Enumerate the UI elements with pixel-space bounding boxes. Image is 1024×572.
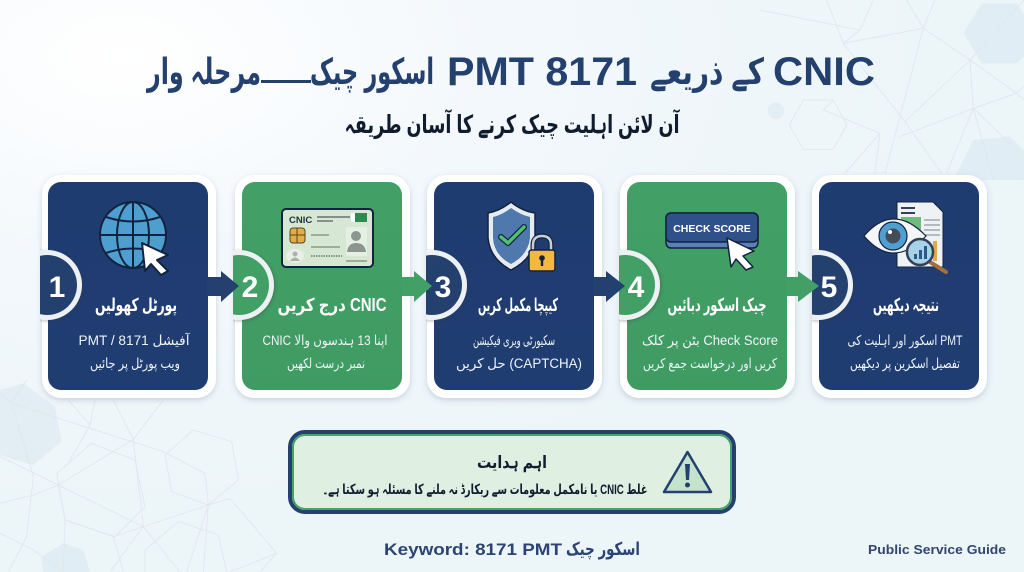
step 5 heading: نتیجہ دیکھیں (873, 295, 939, 316)
step 5 text (848, 333, 962, 372)
step 4 text: Check Score بٹن پر کلک (642, 333, 778, 349)
step 5 text: PMT اسکور اور اہلیت کی (848, 333, 962, 349)
step 2 text (262, 333, 388, 372)
step 4 text: کریں اور درخواست جمع کریں (643, 356, 777, 372)
step 3 text (456, 333, 582, 372)
panel: step 1 (40, 174, 218, 402)
icon: check score button (666, 213, 758, 270)
arrow: step 2 to 3 (401, 271, 432, 302)
title: PMT 8171 (447, 50, 637, 94)
arrow: step 4 to 5 (786, 271, 819, 302)
step 1 text: ویب پورٹل پر جائیں (90, 356, 180, 372)
step 2 text: نمبر درست لکھیں (287, 356, 365, 372)
number badge 2: 2 (242, 271, 258, 304)
number badge 3: 3 (435, 271, 451, 304)
icon: warning triangle (664, 452, 711, 492)
step 2 heading: CNIC درج کریں (278, 295, 386, 316)
step 1 heading: پورٹل کھولیں (95, 295, 177, 316)
step 5 text: تفصیل اسکرین پر دیکھیں (850, 356, 960, 372)
number badge 4: 4 (628, 271, 645, 304)
title (146, 50, 875, 94)
number badge 1: 1 (49, 271, 65, 304)
title: کے ذریعے (650, 51, 764, 93)
panel: step 4 (618, 174, 798, 402)
step 3 text: (CAPTCHA) حل کریں (456, 356, 582, 372)
arrow: step 1 to 2 (207, 271, 239, 302)
callout heading: اہم ہدایت (477, 453, 547, 472)
title: مرحلہ وار (146, 51, 261, 93)
callout text: غلط CNIC یا نامکمل معلومات سے ریکارڈ نہ ملنے کا مسئلہ ہو سکتا ہے۔ (322, 481, 648, 498)
title: CNIC (773, 50, 875, 94)
callout: important instruction (290, 432, 734, 512)
panel: step 3 (424, 174, 604, 402)
step 1 text: آفیشل PMT / 8171 (78, 332, 191, 348)
icon: shield with lock (488, 202, 555, 271)
step 3 text: سکیورٹی ویری فیکیشن (473, 333, 555, 349)
number badge 5 (812, 249, 854, 323)
keyword footer: اسکور چیک (566, 539, 640, 560)
step 4 text (642, 333, 778, 372)
panel: step 2 (232, 174, 412, 402)
title: اسکور چیک (310, 51, 434, 93)
icon: globe with cursor (100, 202, 168, 275)
icon: CNIC card: CNIC (289, 215, 312, 226)
number badge 3 (426, 249, 468, 323)
number badge 2 (233, 249, 276, 323)
icon: CNIC card (282, 209, 373, 267)
number badge 5: 5 (821, 271, 837, 304)
icon: check score button: CHECK SCORE (673, 223, 751, 235)
panel: step 5 (783, 175, 987, 398)
number badge 1 (40, 249, 83, 323)
number badge 4 (619, 249, 662, 323)
source label: Public Service Guide (868, 542, 1006, 557)
arrow: step 3 to 4 (593, 271, 625, 302)
step 1 text (78, 332, 191, 372)
icon: eye, document and magnifier (864, 202, 946, 272)
subtitle: آن لائن اہلیت چیک کرنے کا آسان طریقہ (344, 109, 680, 140)
keyword footer (384, 539, 640, 560)
step 4 heading: چیک اسکور دبائیں (668, 295, 766, 316)
step 2 text: اپنا 13 ہندسوں والا CNIC (262, 333, 388, 349)
step 3 heading: کیپچا مکمل کریں (478, 295, 558, 316)
keyword footer: Keyword: 8171 PMT (384, 540, 563, 559)
